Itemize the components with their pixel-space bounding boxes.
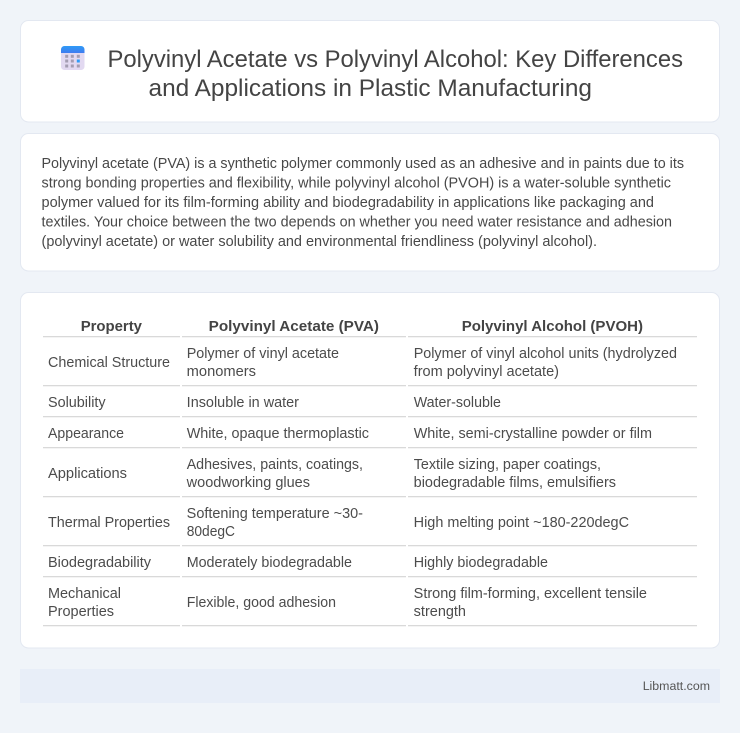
row: solubility: Solubility: [48, 395, 106, 411]
row: thermal properties: 80degC: [187, 524, 235, 540]
row: applications: woodworking glues: [186, 475, 310, 491]
row: biodegradability: Moderately biodegradable: [187, 555, 352, 571]
row: solubility: Insoluble in water: [187, 395, 299, 411]
row: thermal properties: Softening temperature ~30-: [187, 506, 363, 522]
panel: comparison table: [20, 292, 720, 648]
row: biodegradability: [48, 555, 548, 571]
table header row: Polyvinyl Acetate (PVA): [209, 318, 379, 335]
row: chemical structure: Polymer of vinyl acetate: [187, 346, 339, 362]
icon: calendar: [61, 46, 84, 70]
row: applications: Adhesives, paints, coatings,: [187, 457, 363, 473]
title: Polyvinyl Acetate vs Polyvinyl Alcohol: Key Differences: [108, 46, 683, 73]
footer bar: [20, 669, 720, 703]
panel: summary text: [20, 134, 720, 271]
row: biodegradability: Highly biodegradable: [414, 555, 548, 571]
row: mechanical properties: Properties: [48, 604, 114, 620]
row: thermal properties: [48, 506, 629, 540]
row: chemical structure: Polymer of vinyl alcohol units (hydrolyzed: [414, 346, 677, 362]
row: appearance: White, semi-crystalline powder or film: [414, 426, 652, 442]
summary paragraph: (polyvinyl acetate) or water solubility and environmental friendliness (polyvinyl alcohol).: [42, 234, 597, 250]
table header row: Polyvinyl Alcohol (PVOH): [462, 318, 643, 335]
summary paragraph: Polyvinyl acetate (PVA) is a synthetic polymer commonly used as an adhesive and in paints due to its: [42, 156, 684, 172]
row: appearance: White, opaque thermoplastic: [187, 426, 369, 442]
title: [108, 46, 683, 102]
row: solubility: [48, 395, 501, 411]
table rules: [43, 336, 697, 626]
row: applications: Textile sizing, paper coatings,: [414, 457, 601, 473]
row: appearance: Appearance: [48, 426, 124, 442]
row: chemical structure: [48, 346, 677, 380]
row: solubility: Water-soluble: [414, 395, 501, 411]
row: chemical structure: from polyvinyl acetate): [414, 364, 559, 380]
summary paragraph: textiles. Your choice between the two depends on whether you need water resistance and adhesion: [42, 214, 672, 230]
summary paragraph: [42, 156, 684, 250]
row: biodegradability: Biodegradability: [48, 555, 152, 571]
row: chemical structure: monomers: [187, 364, 256, 380]
footer credit: Libmatt.com: [643, 679, 710, 693]
row: mechanical properties: [48, 586, 647, 620]
row: applications: biodegradable films, emulsifiers: [414, 475, 616, 491]
row: chemical structure: Chemical Structure: [48, 355, 170, 371]
row: applications: Applications: [48, 466, 127, 482]
summary paragraph: polymer valued for its film-forming ability and biodegradability in applications like packaging and: [42, 195, 654, 211]
row: thermal properties: High melting point ~180-220degC: [414, 515, 629, 531]
panel: title header: [20, 20, 720, 122]
row: mechanical properties: strength: [414, 604, 466, 620]
row: appearance: [48, 426, 652, 442]
summary paragraph: strong bonding properties and flexibility, while polyvinyl alcohol (PVOH) is a water-soluble synthetic: [42, 176, 671, 192]
table header row: Property: [81, 318, 143, 335]
row: applications: [48, 457, 616, 491]
table header row: [81, 318, 643, 335]
row: mechanical properties: Flexible, good adhesion: [187, 595, 336, 611]
row: mechanical properties: Mechanical: [48, 586, 121, 602]
title: and Applications in Plastic Manufacturing: [148, 75, 592, 102]
row: mechanical properties: Strong film-forming, excellent tensile: [414, 586, 647, 602]
row: thermal properties: Thermal Properties: [48, 515, 170, 531]
